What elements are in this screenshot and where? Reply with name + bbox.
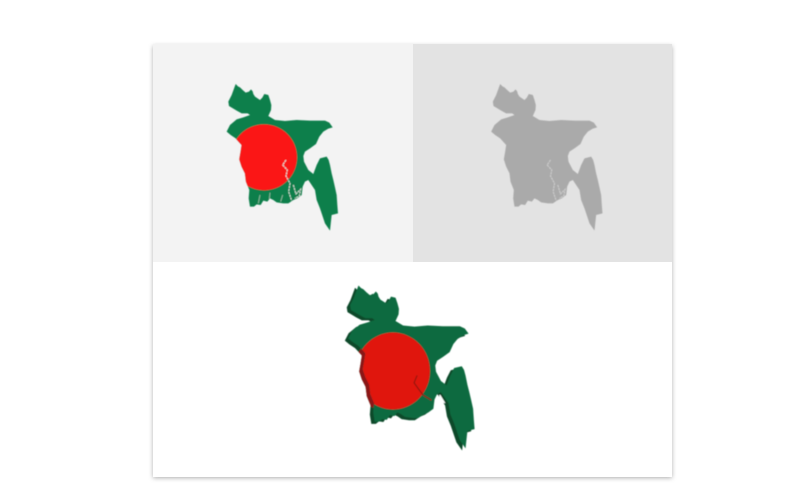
map extrusion bbox=[345, 288, 471, 451]
panel: light flag map background bbox=[153, 44, 413, 262]
panel: 3D map background bbox=[153, 262, 672, 477]
flat flag map of Bangladesh bbox=[227, 84, 338, 231]
grey silhouette map of Bangladesh bbox=[491, 84, 602, 231]
panel: grey map background bbox=[413, 44, 672, 262]
map top face bbox=[348, 286, 475, 448]
3D flag map of Bangladesh bbox=[345, 286, 475, 451]
card shadow bbox=[153, 46, 672, 478]
